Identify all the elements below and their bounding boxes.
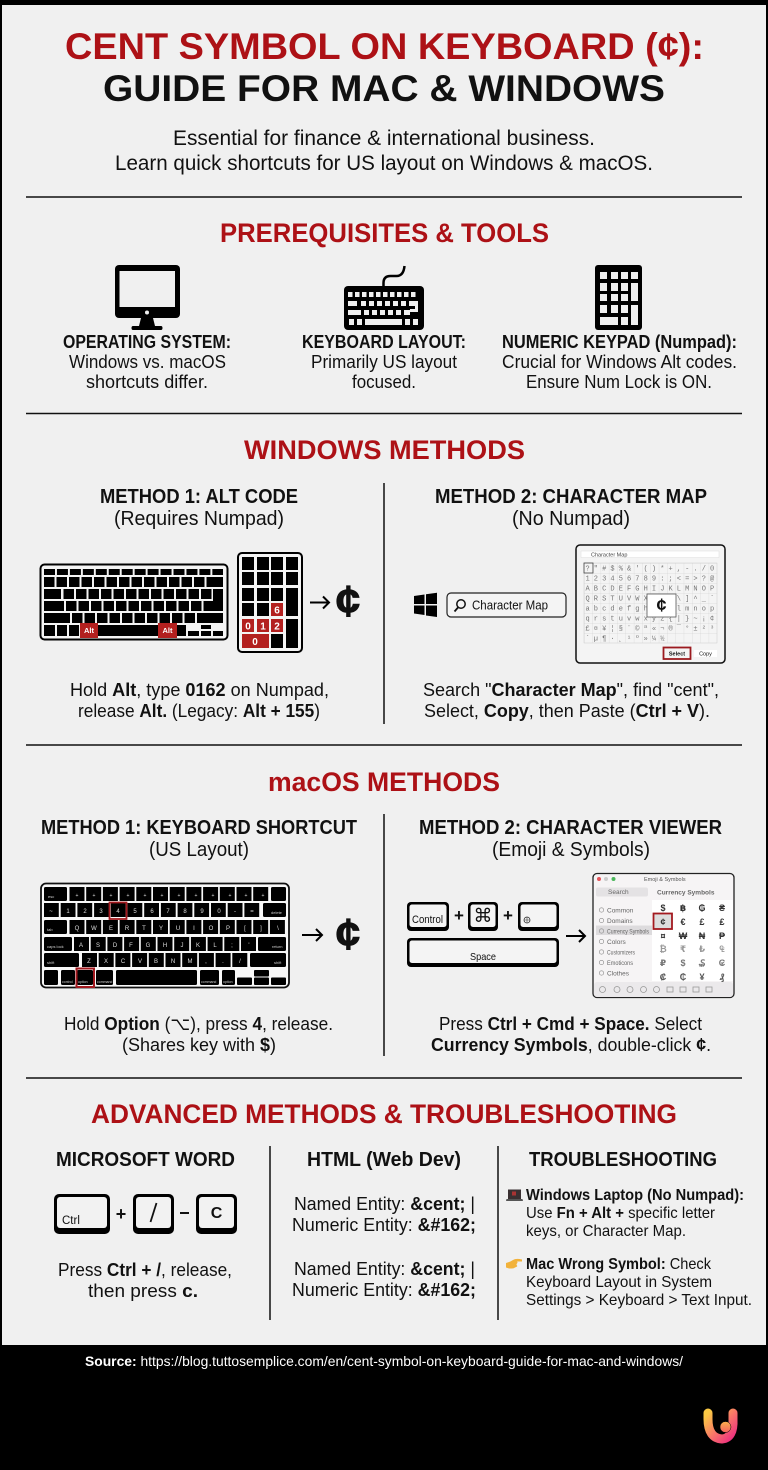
- mac keyboard: QWERTYUIOP[]\: [75, 926, 279, 932]
- character map window: abcdefghijklmnop: [586, 606, 718, 614]
- ctrl key: Ctrl: [62, 1215, 80, 1227]
- logo: [708, 1413, 733, 1439]
- panel: macos methods: [41, 767, 734, 1056]
- mac wrong symbol tip: Keyboard Layout in System: [526, 1274, 712, 1291]
- text: operating system: OPERATING SYSTEM:: [63, 331, 231, 352]
- alt key right: Alt: [162, 626, 173, 635]
- numpad with 0162: [238, 553, 302, 652]
- heading: windows methods: WINDOWS METHODS: [244, 435, 525, 465]
- windows method 1 text: Hold Alt, type 0162 on Numpad,: [70, 679, 329, 700]
- search box: Character Map: [472, 598, 548, 612]
- title: [65, 26, 704, 109]
- subtitle: Learn quick shortcuts for US layout on Windows & macOS.: [115, 152, 653, 175]
- text: numeric keypad: NUMERIC KEYPAD (Numpad):: [502, 331, 737, 352]
- mac method 1 text: [64, 1013, 333, 1055]
- character viewer window: Emoticons: [607, 960, 634, 967]
- character viewer window: Currency Symbols: [657, 890, 715, 896]
- mac wrong symbol tip: Mac Wrong Symbol: Check: [526, 1256, 712, 1273]
- text: numeric keypad: [502, 331, 737, 392]
- html entities second block: Numeric Entity: &#162;: [292, 1279, 476, 1300]
- word text: [58, 1259, 232, 1301]
- windows method 1 text: release Alt. (Legacy: Alt + 155): [78, 700, 320, 721]
- dash: [180, 1212, 189, 1214]
- method 1 heading: METHOD 1: ALT CODE: [100, 486, 298, 508]
- arrow: [566, 930, 585, 942]
- text: numeric keypad: Ensure Num Lock is ON.: [526, 371, 712, 392]
- windows method 2 text: [423, 679, 719, 721]
- alt key left: Alt: [84, 626, 94, 635]
- mac keyboard: delete: [271, 910, 283, 915]
- panel: windows methods: [40, 435, 725, 724]
- cent symbol: ¢: [336, 910, 360, 959]
- character viewer window: Colors: [607, 939, 627, 946]
- method 2 heading: [435, 486, 707, 530]
- mac keyboard: ASDFGHJKL;': [79, 943, 250, 949]
- heading: troubleshooting: TROUBLESHOOTING: [529, 1149, 717, 1171]
- mac keyboard: ZXCVBNM,./: [87, 959, 241, 965]
- text: operating system: Windows vs. macOS: [69, 351, 226, 372]
- icon: keyboard: [344, 266, 424, 330]
- character viewer window: Domains: [607, 918, 633, 925]
- mac method 1 text: (Shares key with $): [122, 1034, 276, 1055]
- highlight: 4 key: [110, 902, 126, 919]
- heading: macos methods: macOS METHODS: [268, 767, 500, 797]
- windows method 2 text: Select, Copy, then Paste (Ctrl + V).: [424, 700, 710, 721]
- mac wrong symbol tip: Settings > Keyboard > Text Input.: [526, 1292, 752, 1309]
- numpad with 0162: 6: [274, 606, 280, 616]
- numpad with 0162: 1: [260, 622, 266, 632]
- method 2 heading: METHOD 2: CHARACTER MAP: [435, 486, 707, 508]
- method 1 heading: (Requires Numpad): [114, 508, 284, 530]
- text: keyboard layout: focused.: [352, 371, 416, 392]
- icon: monitor: [115, 265, 180, 330]
- mac keyboard: [41, 884, 289, 988]
- space key: [407, 938, 559, 967]
- html entities first block: Named Entity: &cent; |: [294, 1193, 475, 1214]
- character map window: [576, 545, 725, 663]
- heading: prerequisites: PREREQUISITES & TOOLS: [220, 218, 549, 248]
- character map window: ´µ¶·¸¹º»¼½: [586, 634, 669, 644]
- character map window: 123456789:;<=>?@: [586, 576, 718, 584]
- mac keyboard: command: [201, 980, 216, 984]
- mac keyboard: option: [223, 980, 233, 984]
- mac method 1 text: Hold Option (⌥), press 4, release.: [64, 1013, 333, 1034]
- panel: advanced methods and troubleshooting: [54, 1099, 752, 1320]
- character map window: Character Map: [591, 552, 627, 558]
- mac keyboard: command: [97, 980, 112, 984]
- windows laptop tip: Use Fn + Alt + specific letter: [526, 1205, 716, 1222]
- character map window: ABCDEFGHIJKLMNOP: [586, 586, 718, 594]
- search box: [447, 593, 566, 617]
- control key: Control: [412, 914, 443, 926]
- mac keyboard: ++++++++++++: [76, 893, 265, 899]
- mac keyboard: shift: [47, 960, 55, 965]
- subtitle: [115, 127, 653, 175]
- c key: [196, 1194, 237, 1234]
- plus: +: [503, 906, 513, 925]
- character viewer window: ₽$₷₢: [660, 958, 726, 968]
- word text: then press c.: [88, 1280, 198, 1301]
- character viewer window: Emoji & Symbols: [644, 877, 686, 883]
- cent symbol: ¢: [336, 577, 360, 626]
- text: operating system: [63, 331, 231, 392]
- panel: prerequisites and tools: [63, 218, 737, 392]
- command key: [468, 902, 498, 931]
- mac keyboard: esc: [48, 894, 54, 899]
- windows laptop tip: keys, or Character Map.: [526, 1223, 686, 1240]
- ctrl key: [54, 1194, 110, 1234]
- mac keyboard: control: [62, 980, 73, 984]
- character map window: QRSTUVWXYZ[\]^_`: [586, 594, 718, 604]
- icon: windows logo: [414, 593, 437, 617]
- character viewer window: ¤₩₦₱: [660, 931, 725, 941]
- character viewer window: ₡₵¥₰: [660, 972, 725, 982]
- character map window: ?"#$%&'()*+,-./0: [586, 566, 718, 574]
- character map window: qrstuvwxyz{|}~¡¢: [586, 616, 718, 624]
- numpad with 0162: 0: [252, 637, 258, 648]
- character viewer window: ₿₹₺₠: [659, 944, 725, 954]
- windows laptop tip: Windows Laptop (No Numpad):: [526, 1187, 744, 1204]
- mac method 2 text: [431, 1013, 711, 1055]
- mac wrong symbol tip: [526, 1256, 752, 1309]
- highlight: option key: [76, 968, 94, 987]
- character viewer window: ¢€£₤: [660, 917, 725, 927]
- character viewer window: Customizers: [607, 950, 636, 956]
- arrow: [310, 596, 329, 608]
- mac method 1 heading: [41, 817, 357, 861]
- character map window: ¢: [656, 596, 667, 616]
- numpad with 0162: 0: [245, 622, 251, 632]
- title: GUIDE FOR MAC & WINDOWS: [103, 68, 665, 109]
- character map window: Copy: [699, 652, 712, 658]
- text: numeric keypad: Crucial for Windows Alt codes.: [502, 351, 737, 372]
- subtitle: Essential for finance & international business.: [173, 127, 595, 150]
- character map window: £¤¥¦§¨©ª«¬®¯°±²³: [586, 624, 718, 634]
- mac method 1 heading: (US Layout): [149, 839, 249, 861]
- mac keyboard: ~1234567890-=: [49, 909, 254, 915]
- html entities first block: Numeric Entity: &#162;: [292, 1214, 476, 1235]
- text: keyboard layout: KEYBOARD LAYOUT:: [302, 331, 466, 352]
- plus: +: [454, 906, 464, 925]
- mac keyboard: caps lock: [47, 944, 64, 949]
- mac method 2 text: Currency Symbols, double-click ¢.: [431, 1034, 711, 1055]
- c key: C: [211, 1205, 223, 1222]
- html entities second block: [292, 1258, 476, 1300]
- character viewer window: Clothes: [607, 970, 630, 978]
- slash key: [133, 1194, 174, 1234]
- character viewer window: Common: [607, 908, 634, 914]
- icon: pointing hand: [506, 1259, 522, 1268]
- character viewer window: $฿₲₴: [660, 903, 725, 913]
- mac keyboard: tab: [47, 927, 53, 932]
- windows laptop tip: [526, 1187, 744, 1240]
- keyboard with alt keys: [40, 564, 228, 640]
- text: operating system: shortcuts differ.: [86, 371, 208, 392]
- mac method 1 heading: METHOD 1: KEYBOARD SHORTCUT: [41, 817, 357, 839]
- icon: laptop: [506, 1190, 523, 1201]
- icon: numeric keypad: [595, 265, 642, 330]
- alt key right: [158, 623, 177, 638]
- numpad with 0162: 2: [274, 622, 280, 632]
- character viewer window: [593, 874, 734, 998]
- mac method 2 text: Press Ctrl + Cmd + Space. Select: [439, 1013, 702, 1034]
- html entities second block: Named Entity: &cent; |: [294, 1258, 475, 1279]
- mac method 2 heading: METHOD 2: CHARACTER VIEWER: [419, 817, 723, 839]
- space key: Space: [470, 951, 496, 963]
- control key: [407, 902, 449, 931]
- word text: Press Ctrl + /, release,: [58, 1259, 232, 1280]
- globe key: [518, 902, 559, 931]
- mac method 2 heading: [419, 817, 723, 861]
- method 2 heading: (No Numpad): [512, 508, 630, 530]
- plus: +: [116, 1204, 126, 1224]
- mac keyboard: shift: [274, 960, 282, 965]
- windows method 2 text: Search "Character Map", find "cent",: [423, 679, 719, 700]
- arrow: [302, 929, 322, 941]
- source line: Source: https://blog.tuttosemplice.com/en/cent-symbol-on-keyboard-guide-for-mac-and-windows/: [85, 1353, 683, 1369]
- method 1 heading: [100, 486, 298, 530]
- mac method 2 heading: (Emoji & Symbols): [492, 839, 650, 861]
- character viewer window: Search: [608, 889, 629, 896]
- heading: advanced methods: ADVANCED METHODS & TROUBLESHOOTING: [91, 1099, 677, 1129]
- mac keyboard: return: [272, 944, 282, 949]
- windows method 1 text: [70, 679, 329, 721]
- command key: ⌘: [474, 905, 492, 927]
- text: keyboard layout: [302, 331, 466, 392]
- character viewer window: Currency Symbols: [607, 928, 650, 936]
- heading: microsoft word: MICROSOFT WORD: [56, 1149, 235, 1171]
- alt key left: [80, 623, 98, 638]
- title: CENT SYMBOL ON KEYBOARD (¢):: [65, 26, 704, 67]
- html entities first block: [292, 1193, 476, 1235]
- heading: html: HTML (Web Dev): [307, 1149, 461, 1171]
- text: keyboard layout: Primarily US layout: [311, 351, 457, 372]
- character map window: Select: [669, 652, 685, 658]
- mac keyboard: option: [78, 980, 88, 984]
